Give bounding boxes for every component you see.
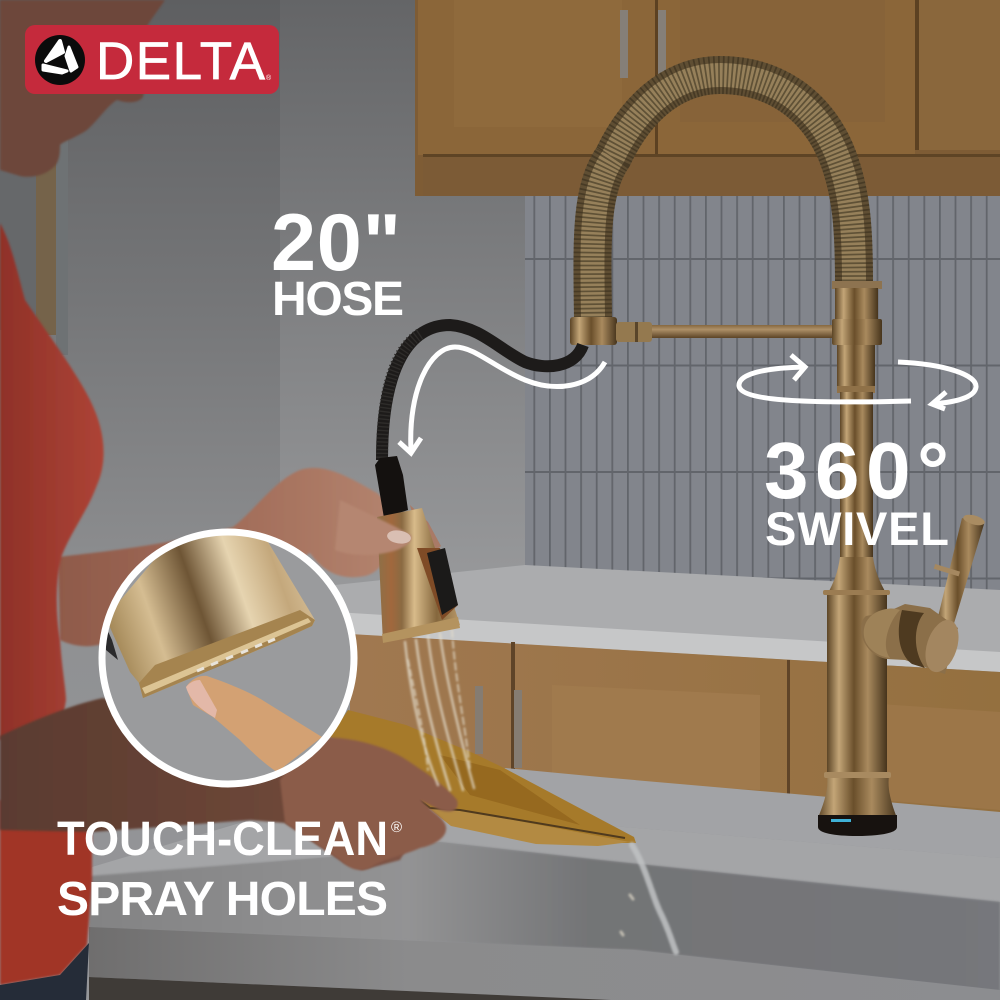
label: touch-clean spray holes (57, 813, 402, 926)
face (0, 0, 165, 177)
lower cabinets (350, 634, 1000, 830)
shadow below rim (89, 977, 611, 1000)
upper cabinets (415, 0, 1000, 196)
label: 20 inch hose: HOSE (272, 273, 404, 326)
swivel arrows (739, 355, 976, 409)
label: touch-clean spray holes: ® (391, 819, 402, 836)
black hose (382, 325, 583, 460)
water spray (405, 630, 676, 952)
lower forearm (0, 698, 440, 870)
black touch base (818, 815, 897, 836)
label: touch-clean spray holes: SPRAY HOLES (57, 873, 388, 926)
counter front band (89, 805, 1000, 902)
backsplash tiles (525, 195, 1000, 590)
inset ring (102, 532, 354, 784)
label: 360 degree swivel: SWIVEL (765, 502, 949, 555)
front hand on board (280, 737, 458, 870)
horizontal arm (650, 325, 840, 338)
shirt lower (0, 800, 92, 985)
sink basin (89, 842, 1000, 992)
fingernail (386, 529, 412, 545)
person (0, 0, 441, 1000)
back countertop (335, 565, 1000, 672)
spray face (108, 532, 315, 698)
Delta logo: ® (266, 74, 272, 82)
finger nail (186, 680, 217, 718)
thumb over spray head (335, 500, 412, 555)
black button edge (106, 632, 118, 660)
back fingers (410, 505, 441, 560)
faucet (335, 75, 986, 836)
label: touch-clean spray holes: TOUCH-CLEAN (57, 813, 388, 866)
inset circle: spray holes detail (102, 532, 354, 784)
arm fitting (570, 317, 652, 345)
upper column collar (832, 281, 882, 345)
label: 360 degree swivel: 360° (764, 426, 949, 515)
label: 360 degree swivel (764, 426, 949, 555)
coiled spring arch (592, 75, 854, 318)
hose arrow (399, 347, 605, 453)
sink counter (89, 768, 1000, 1000)
spray head (375, 456, 460, 643)
label: 20 inch hose (271, 198, 404, 326)
front rim (89, 927, 1000, 1000)
Delta logo (25, 25, 279, 94)
handle (861, 513, 986, 676)
fingertip (186, 676, 322, 772)
inset content (105, 532, 322, 772)
Delta logo: DELTA (96, 32, 266, 91)
column (818, 345, 897, 818)
spray ring (139, 610, 315, 698)
label: 20 inch hose: 20" (271, 198, 401, 288)
logo mark (35, 35, 85, 85)
jeans (0, 943, 89, 1000)
cutting board with food (330, 710, 636, 846)
red shirt (0, 223, 104, 740)
spray holes (197, 639, 275, 671)
counter top surface (450, 768, 1000, 858)
upper arm and hand holding spray (58, 468, 412, 646)
